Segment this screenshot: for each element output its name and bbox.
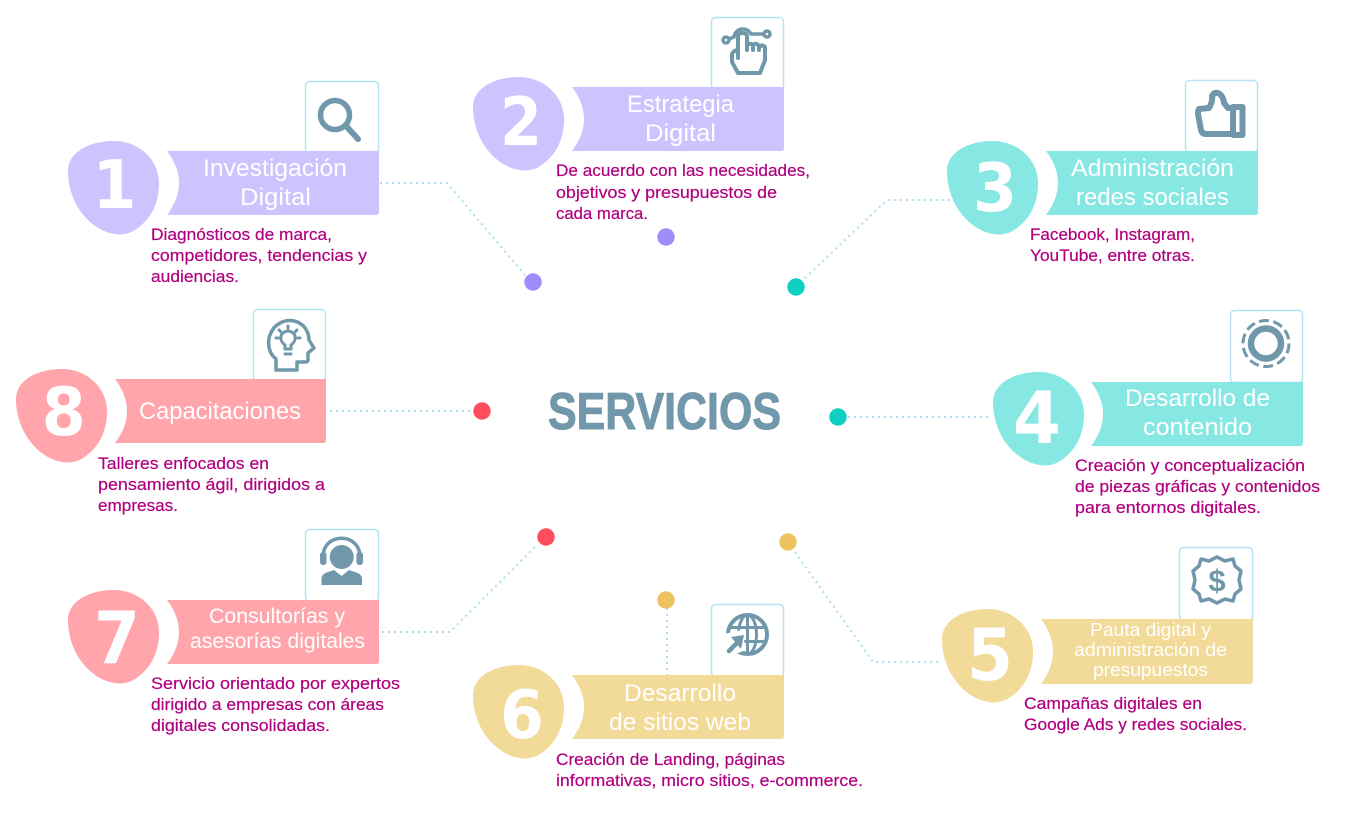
description: Facebook, Instagram, (1030, 225, 1195, 244)
number badge 7 (68, 590, 159, 683)
description: Campañas digitales en (1024, 694, 1202, 713)
banner heading (572, 675, 784, 739)
number badge 3 (947, 141, 1038, 234)
connector dots (473, 228, 847, 609)
description (151, 674, 400, 735)
description: cada marca. (556, 204, 648, 223)
banner heading: Estrategia (627, 91, 735, 118)
icon box: head with lightbulb (254, 310, 326, 382)
icon box: dollar badge (1180, 548, 1252, 620)
description: dirigido a empresas con áreas (151, 695, 384, 714)
number badge 4: 4 (1013, 376, 1061, 460)
panel: 7 Consultorías (68, 530, 400, 735)
number badge 7: 7 (94, 596, 140, 680)
description: Creación y conceptualización (1075, 456, 1305, 475)
number badge 1: 1 (92, 146, 136, 224)
panel: 4 Desarrollo de contenido (993, 310, 1320, 517)
number badge 6 (473, 665, 564, 758)
description: audiencias. (151, 267, 239, 286)
description (556, 161, 810, 223)
panel: 8 Capacitaciones (16, 310, 326, 515)
description (1030, 225, 1195, 265)
panel: 3 Administración redes sociales (947, 80, 1258, 265)
banner heading: Administración (1071, 155, 1234, 182)
number badge 5 (942, 609, 1033, 702)
description: Servicio orientado por expertos (151, 674, 400, 693)
description (151, 225, 368, 286)
panel: 6 Desarrollo de sitios web (473, 604, 863, 790)
banner heading: administración de (1074, 640, 1227, 660)
icon box: thumbs up (1186, 80, 1258, 152)
number badge 8 (16, 369, 107, 462)
number badge 4 (993, 372, 1084, 465)
banner heading: Consultorías y (209, 605, 345, 628)
banner heading: Pauta digital y (1090, 620, 1211, 640)
description: para entornos digitales. (1075, 498, 1261, 517)
description: empresas. (98, 496, 178, 515)
description (556, 750, 863, 790)
description: Google Ads y redes sociales. (1024, 715, 1247, 734)
banner heading (572, 87, 784, 151)
banner heading: Digital (645, 120, 716, 147)
number badge 8: 8 (42, 373, 86, 451)
banner heading: presupuestos (1093, 660, 1208, 680)
number badge 2: 2 (500, 83, 542, 161)
banner heading (167, 151, 379, 215)
description (98, 454, 326, 515)
title: SERVICIOS (548, 383, 781, 441)
description: pensamiento ágil, dirigidos a (98, 475, 326, 494)
banner heading: Desarrollo (624, 680, 736, 707)
description: Diagnósticos de marca, (151, 225, 332, 244)
number badge 6: 6 (500, 676, 544, 754)
banner heading: redes sociales (1076, 184, 1229, 211)
icon box: touch hand (712, 18, 784, 90)
connector lines (330, 183, 992, 675)
description: objetivos y presupuestos de (556, 183, 777, 202)
number badge 2 (473, 77, 564, 170)
icon box: dashed ring (1230, 310, 1302, 382)
description: de piezas gráficas y contenidos (1075, 477, 1320, 496)
banner heading (1091, 382, 1303, 446)
description: Talleres enfocados en (98, 454, 269, 473)
banner heading (167, 600, 379, 664)
banner heading: asesorías digitales (190, 630, 365, 653)
banner heading: contenido (1143, 414, 1252, 441)
banner heading (1046, 151, 1258, 215)
description (1024, 694, 1247, 734)
number badge 3: 3 (973, 149, 1017, 227)
banner heading: de sitios web (609, 709, 751, 736)
banner heading: Capacitaciones (139, 398, 301, 425)
description: YouTube, entre otras. (1030, 246, 1195, 265)
banner heading (1041, 619, 1253, 684)
panel: 2 Estrategia Digital (473, 18, 810, 223)
icon box: globe with cursor (712, 604, 784, 676)
panel: 1 Investigación Digital (68, 82, 379, 286)
banner heading: Desarrollo de (1125, 385, 1270, 412)
description: competidores, tendencias y (151, 246, 368, 265)
panel: 5 Pauta digital (942, 548, 1253, 734)
description: Creación de Landing, páginas (556, 750, 785, 769)
icon box: support agent (306, 530, 378, 602)
number badge 1 (68, 141, 159, 234)
icon box: dollar badge: $ (1208, 563, 1226, 598)
description (1075, 456, 1320, 517)
description: De acuerdo con las necesidades, (556, 161, 810, 180)
banner heading (115, 379, 326, 443)
description: informativas, micro sitios, e-commerce. (556, 771, 863, 790)
icon box: search (306, 82, 378, 154)
number badge 5: 5 (967, 613, 1013, 697)
banner heading: Digital (240, 184, 311, 211)
banner heading: Investigación (203, 155, 347, 182)
description: digitales consolidadas. (151, 716, 330, 735)
